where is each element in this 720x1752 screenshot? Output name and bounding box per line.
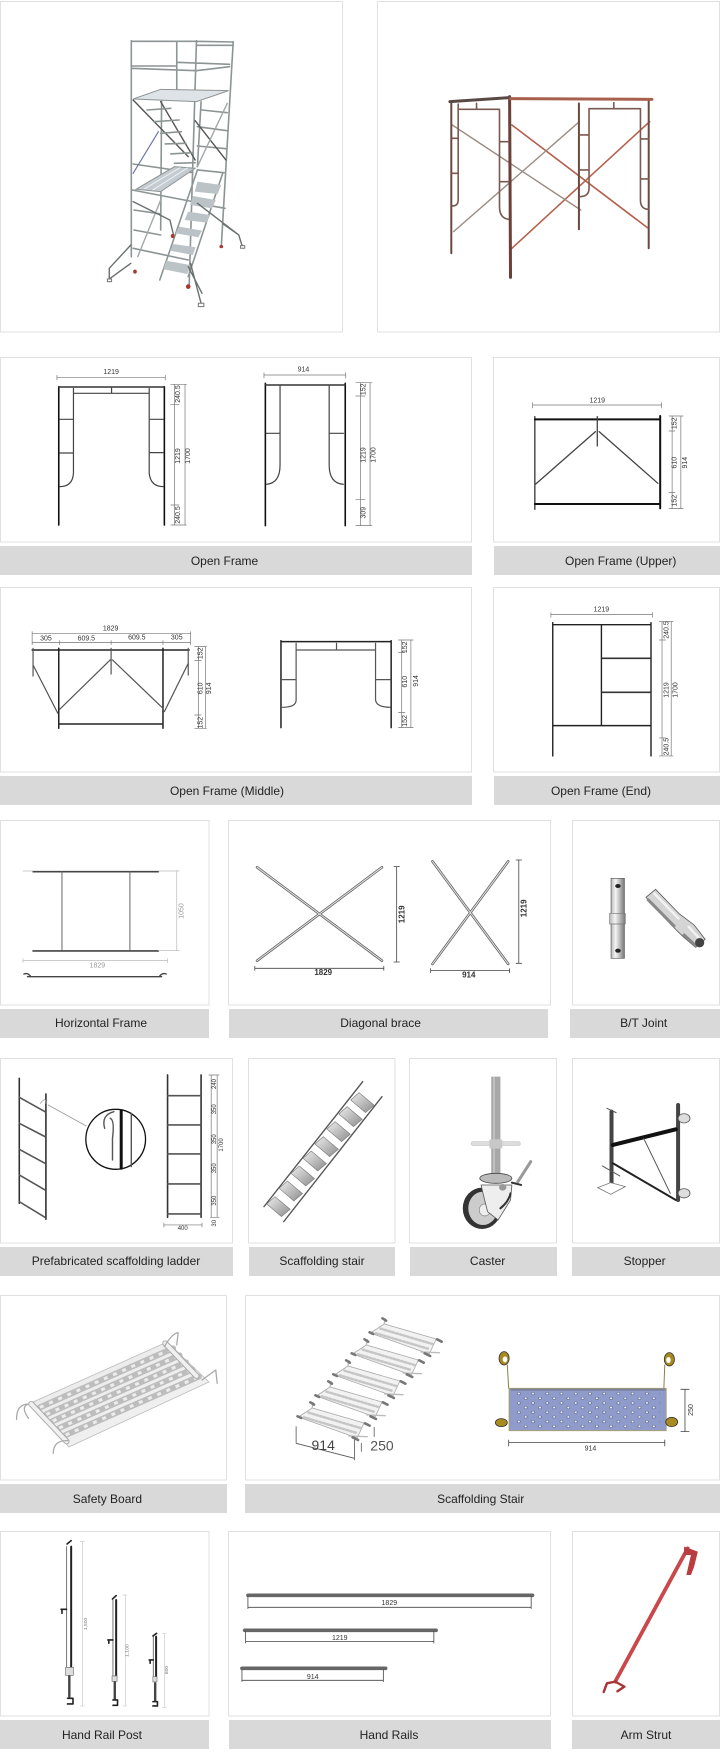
panel: open frame end xyxy=(494,588,720,772)
drawing: three hand rail posts: 1,500 xyxy=(83,1618,89,1630)
panel: hand rails xyxy=(228,1532,550,1716)
drawing: open frame end: 1700 xyxy=(673,682,680,698)
illustration: red arm strut xyxy=(604,1547,698,1692)
drawing: open frame upper: 610 xyxy=(672,457,679,468)
caption: Open Frame (Upper) xyxy=(494,546,720,575)
caption: Open Frame (Middle) xyxy=(0,776,472,805)
panel: prefabricated ladder xyxy=(0,1058,232,1243)
caption: Scaffolding Stair xyxy=(245,1484,720,1513)
callout: hook detail xyxy=(40,1100,146,1169)
caption: Horizontal Frame xyxy=(0,1009,209,1038)
caption: Open Frame (End) xyxy=(494,776,720,805)
drawing: diagonal braces: 1219 xyxy=(397,905,406,923)
drawing: open frame middle: 914 xyxy=(206,682,213,694)
caption: Open Frame: Open Frame xyxy=(191,554,259,568)
drawing: three hand rails: 1829 xyxy=(382,1600,397,1607)
drawing: open frame middle: 610 xyxy=(197,682,204,694)
panel: diagonal brace xyxy=(228,820,550,1005)
caption: Hand Rails xyxy=(229,1720,551,1749)
drawing: ladder with hook detail: 30 xyxy=(212,1219,218,1227)
caption: Caster: Caster xyxy=(470,1254,505,1268)
drawing: diagonal braces: 1829 xyxy=(314,968,333,977)
drawing: open frame end xyxy=(551,607,680,756)
illustration: blue perforated tread xyxy=(495,1352,695,1453)
illustration: stopper frame xyxy=(598,1105,690,1200)
panel: open frame middle xyxy=(0,588,472,772)
drawing: open frame middle: 152 xyxy=(402,715,409,727)
drawing: ladder with hook detail: 240 xyxy=(212,1078,218,1089)
illustration: blue perforated tread: 914 xyxy=(585,1446,596,1453)
caption: Hand Rail Post: Hand Rail Post xyxy=(62,1728,143,1742)
caption: Scaffolding Stair: Scaffolding Stair xyxy=(437,1492,524,1506)
caption: Open Frame (Upper): Open Frame (Upper) xyxy=(565,554,676,568)
drawing: open frame middle: 914 xyxy=(413,675,420,687)
drawing: open frame 1219 and 914: 1219 xyxy=(360,447,367,463)
caption: Open Frame (End): Open Frame (End) xyxy=(551,784,651,798)
drawing: ladder with hook detail: 350 xyxy=(212,1104,218,1114)
illustration: painted frame scaffold xyxy=(450,97,652,277)
drawing: three hand rails: 914 xyxy=(307,1674,319,1681)
caption: Scaffolding stair xyxy=(249,1247,395,1276)
casters xyxy=(133,234,223,289)
drawing: open frame end: 240.5 xyxy=(663,621,670,639)
drawing: open frame 1219 and 914: 240.5 xyxy=(175,506,182,524)
drawing: open frame middle: 152 xyxy=(197,647,204,659)
panel: scaffolding stair set xyxy=(246,1296,720,1480)
caption: B/T Joint xyxy=(570,1009,720,1038)
panel: safety board xyxy=(0,1296,226,1480)
caption: Arm Strut xyxy=(572,1720,720,1749)
caption: Stopper xyxy=(572,1247,720,1276)
drawing: diagonal braces: 1219 xyxy=(520,899,529,917)
caption: Scaffolding stair: Scaffolding stair xyxy=(279,1254,365,1268)
caption: Hand Rails: Hand Rails xyxy=(360,1728,418,1742)
drawing: three hand rail posts: 1,100 xyxy=(125,1644,131,1657)
panel: hand rail post xyxy=(0,1532,209,1716)
drawing: ladder with hook detail: 350 xyxy=(212,1163,218,1173)
drawing: horizontal frame: 1050 xyxy=(179,903,186,919)
caption: Open Frame (Middle): Open Frame (Middle) xyxy=(170,784,284,798)
illustration: caster wheel with screw jack xyxy=(463,1077,531,1229)
drawing: ladder with hook detail: 400 xyxy=(178,1226,188,1232)
drawing: open frame upper: 152 xyxy=(672,495,679,506)
panel: scaffolding stair xyxy=(248,1058,395,1243)
drawing: open frame middle: 152 xyxy=(402,641,409,653)
drawing: open frame 1219 and 914: 1700 xyxy=(371,447,378,463)
panel: open frame upper xyxy=(494,358,720,542)
panel: red steel frame photo xyxy=(378,2,720,332)
caption: Safety Board xyxy=(0,1484,227,1513)
drawing: open frame 1219 and 914: 152 xyxy=(360,383,367,395)
drawing: open frame middle: 1829 xyxy=(103,626,119,633)
illustration: stair grates with dimensions xyxy=(296,1318,442,1460)
caption: Hand Rail Post xyxy=(0,1720,209,1749)
drawing: ladder with hook detail: 350 xyxy=(212,1195,218,1206)
caption: Stopper: Stopper xyxy=(624,1254,666,1268)
drawing: stair flight xyxy=(264,1082,382,1222)
drawing: three hand rail posts: 800 xyxy=(164,1666,170,1674)
caption: Diagonal brace xyxy=(229,1009,548,1038)
drawing: open frame upper xyxy=(533,398,689,509)
drawing: open frame middle: 152 xyxy=(197,717,204,728)
drawing: open frame 1219 and 914: 1219 xyxy=(175,448,182,464)
drawing: diagonal braces: 914 xyxy=(462,970,476,979)
drawing: horizontal frame xyxy=(23,871,186,977)
drawing: diagonal braces xyxy=(255,860,529,979)
illustration: aluminium stair tower xyxy=(107,41,245,307)
drawing: horizontal frame: 1829 xyxy=(90,962,105,969)
caption: Open Frame xyxy=(0,546,472,575)
caption: Arm Strut: Arm Strut xyxy=(621,1728,672,1742)
drawing: open frame middle: 609.5 xyxy=(78,635,95,642)
drawing: open frame end: 1219 xyxy=(663,682,670,698)
drawing: open frame middle: 305 xyxy=(40,635,52,642)
drawing: ladder with hook detail: 1700 xyxy=(219,1138,225,1152)
drawing: three hand rail posts xyxy=(61,1541,170,1707)
illustration: stair grates with dimensions: 914 xyxy=(312,1437,335,1453)
drawing: ladder with hook detail xyxy=(19,1075,225,1232)
panel: horizontal frame xyxy=(0,820,209,1005)
caption: Prefabricated scaffolding ladder xyxy=(0,1247,233,1276)
caption: Safety Board: Safety Board xyxy=(73,1492,142,1506)
drawing: open frame middle: 305 xyxy=(171,634,183,641)
drawing: open frame middle xyxy=(32,626,420,728)
drawing: open frame upper: 1219 xyxy=(590,398,605,405)
drawing: open frame 1219 and 914: 914 xyxy=(298,367,309,374)
drawing: ladder with hook detail: 350 xyxy=(212,1134,218,1144)
illustration: joint pins xyxy=(610,878,705,958)
panel: arm strut xyxy=(572,1532,720,1716)
caption: Diagonal brace: Diagonal brace xyxy=(340,1016,421,1030)
drawing: open frame 1219 and 914: 1700 xyxy=(185,448,192,464)
panel: open frame drawings xyxy=(0,358,472,542)
drawing: open frame middle: 610 xyxy=(402,676,409,687)
caption: B/T Joint: B/T Joint xyxy=(620,1016,668,1030)
panel: B/T joint xyxy=(572,820,720,1005)
drawing: open frame middle: 609.5 xyxy=(128,634,146,641)
drawing: open frame upper: 914 xyxy=(682,457,689,468)
drawing: three hand rails: 1219 xyxy=(332,1635,348,1642)
platform: upper deck xyxy=(133,89,229,102)
panel: caster xyxy=(410,1058,556,1243)
drawing: open frame 1219 and 914: 309 xyxy=(360,507,367,518)
stair flight lower xyxy=(160,170,223,280)
drawing: open frame 1219 and 914: 240.5 xyxy=(175,385,182,403)
caption: Horizontal Frame: Horizontal Frame xyxy=(55,1016,147,1030)
panel: stopper xyxy=(572,1058,720,1243)
caption: Caster xyxy=(410,1247,557,1276)
drawing: open frame end: 1219 xyxy=(594,607,609,614)
illustration: perforated safety board xyxy=(17,1333,217,1453)
panel: mobile scaffolding tower photo xyxy=(0,2,342,332)
drawing: open frame end: 240.5 xyxy=(663,738,670,755)
drawing: three hand rails xyxy=(242,1595,533,1682)
drawing: open frame 1219 and 914: 1219 xyxy=(103,369,119,376)
caption: Prefabricated scaffolding ladder: Prefabricated scaffolding ladder xyxy=(32,1254,200,1268)
illustration: stair grates with dimensions: 250 xyxy=(370,1438,394,1454)
illustration: blue perforated tread: 250 xyxy=(688,1404,695,1416)
end bars and hooks xyxy=(17,1333,217,1453)
drawing: open frame upper: 152 xyxy=(672,417,679,429)
platform: lower deck xyxy=(136,167,195,192)
drawing: open frame 1219 and 914 xyxy=(57,367,378,526)
